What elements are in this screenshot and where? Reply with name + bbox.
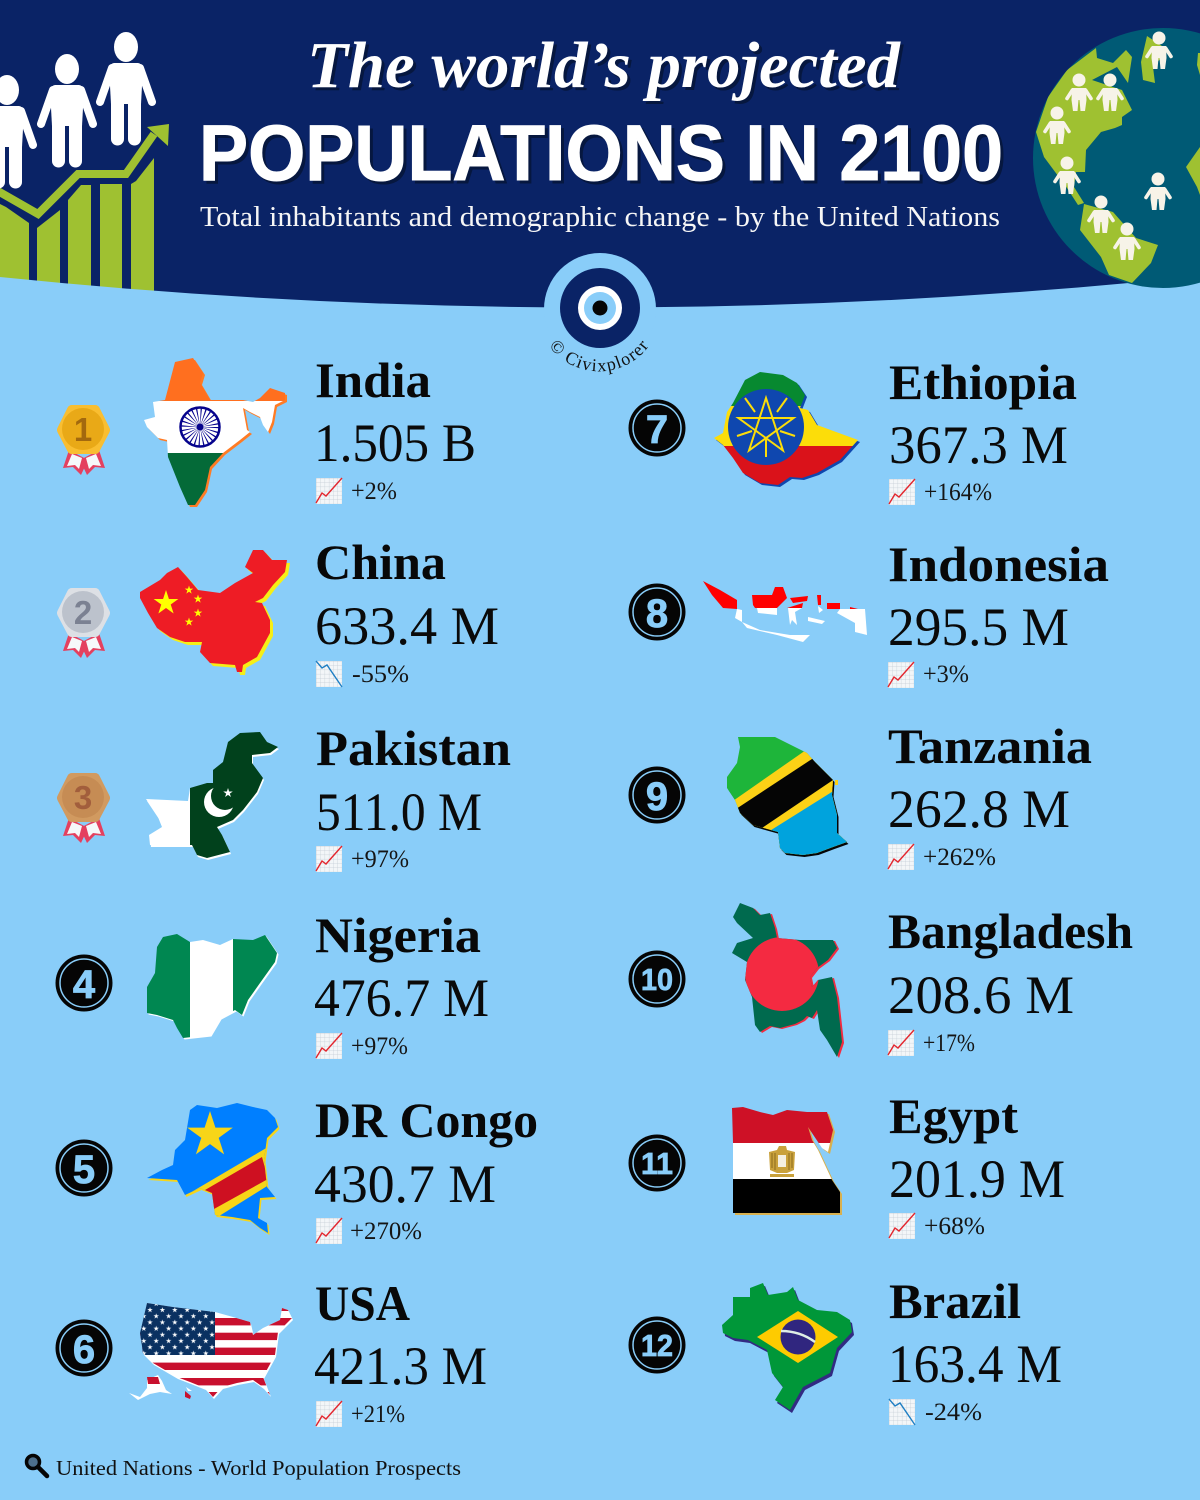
trend icon	[316, 1033, 342, 1059]
rank badge 11	[628, 1134, 686, 1192]
country name: India	[315, 352, 431, 408]
rank badge 7: 7	[646, 408, 668, 452]
country name: DR Congo	[315, 1092, 538, 1148]
country name: Nigeria	[315, 907, 481, 963]
population: 163.4 M	[888, 1334, 1062, 1394]
rank badge 9: 9	[646, 775, 668, 819]
change: -24%	[925, 1399, 982, 1426]
population: 208.6 M	[888, 965, 1074, 1025]
country name: Ethiopia	[889, 354, 1077, 410]
subtitle: Total inhabitants and demographic change - by the United Nations	[200, 201, 1000, 233]
change: -55%	[352, 661, 409, 688]
map: India	[140, 355, 290, 508]
header band	[0, 0, 1200, 340]
logo: eye badge	[544, 253, 656, 365]
trend icon	[888, 844, 914, 870]
row: Bangladesh	[628, 900, 1133, 1060]
map: USA	[129, 1298, 300, 1400]
population: 1.505 B	[314, 413, 476, 473]
change: +17%	[923, 1030, 975, 1057]
population: 430.7 M	[314, 1154, 496, 1214]
emblem: eagle	[769, 1146, 795, 1177]
rank badge 4: 4	[73, 963, 96, 1007]
rank badge 12	[628, 1316, 686, 1374]
icon: growing population chart	[0, 32, 169, 300]
wave: page body edge	[0, 276, 1200, 340]
medal: bronze	[62, 776, 105, 843]
population: 367.3 M	[889, 415, 1068, 475]
row: India	[62, 352, 476, 508]
rank badge 8	[628, 584, 686, 640]
row: Egypt	[628, 1088, 1065, 1240]
country name: Egypt	[889, 1088, 1018, 1144]
country name: Indonesia	[888, 536, 1109, 592]
rank badge 8: 8	[646, 592, 668, 636]
map: Pakistan	[146, 732, 279, 860]
trend icon	[316, 1218, 342, 1244]
change: +97%	[351, 1033, 408, 1060]
trend icon	[316, 846, 342, 872]
change: +262%	[923, 844, 996, 871]
rank badge 9	[628, 766, 686, 824]
logo credit: © Civixplorer	[552, 340, 648, 374]
change: +3%	[923, 661, 969, 688]
population: 295.5 M	[888, 597, 1069, 657]
trend icon	[889, 1213, 915, 1239]
medal: gold	[62, 408, 105, 475]
source note: United Nations - World Population Prospects	[56, 1456, 461, 1480]
title line 2: POPULATIONS IN 2100	[199, 108, 1003, 197]
change: +21%	[351, 1401, 405, 1428]
population: 421.3 M	[314, 1336, 487, 1396]
rank badge 11: 11	[641, 1146, 673, 1181]
country name: Tanzania	[888, 718, 1092, 774]
title line 1: The world’s projected	[307, 29, 901, 102]
map: Ethiopia	[710, 368, 860, 488]
rank badge 10: 10	[641, 962, 673, 997]
map: Brazil	[722, 1283, 854, 1413]
change: +97%	[351, 846, 409, 873]
trend icon	[888, 662, 914, 688]
icon: magnifier	[26, 1456, 47, 1476]
medal: gold: 1	[74, 411, 92, 448]
country name: USA	[315, 1275, 410, 1331]
rank badge 12: 12	[641, 1328, 673, 1363]
row: China	[62, 534, 499, 688]
trend icon	[889, 1399, 915, 1425]
trend icon	[316, 1401, 342, 1427]
country name: Brazil	[889, 1273, 1021, 1329]
map: Bangladesh	[732, 903, 844, 1058]
map: China	[140, 550, 290, 675]
country name: Bangladesh	[888, 903, 1133, 959]
rank badge 6	[56, 1320, 112, 1376]
population: 262.8 M	[888, 779, 1070, 839]
map: Tanzania	[727, 737, 848, 857]
change: +270%	[350, 1218, 422, 1245]
map: Nigeria	[147, 934, 278, 1040]
medal: silver: 2	[74, 594, 92, 631]
change: +68%	[924, 1213, 985, 1240]
medal: bronze: 3	[74, 779, 92, 816]
country name: Pakistan	[316, 720, 511, 776]
icon: globe with people	[1033, 28, 1200, 288]
population: 511.0 M	[316, 782, 482, 842]
rank badge 6: 6	[73, 1328, 95, 1372]
rank badge 5: 5	[73, 1148, 95, 1192]
rank badge 7	[628, 400, 686, 456]
map: DR Congo	[147, 1103, 280, 1235]
country name: China	[315, 534, 446, 590]
trend icon	[889, 479, 915, 505]
row: Pakistan	[62, 720, 511, 873]
population: 476.7 M	[314, 968, 489, 1028]
map: Egypt	[728, 1104, 844, 1215]
change: +164%	[924, 479, 992, 506]
population: 201.9 M	[889, 1149, 1065, 1209]
row: Nigeria	[56, 907, 489, 1060]
row: USA	[56, 1275, 487, 1428]
row: Brazil	[628, 1273, 1062, 1426]
trend icon	[316, 478, 342, 504]
rank badge 5	[56, 1140, 112, 1196]
row: Ethiopia	[628, 354, 1077, 506]
population: 633.4 M	[315, 596, 499, 656]
rank badge 10	[628, 950, 686, 1008]
row: DR Congo	[56, 1092, 538, 1245]
row: Indonesia	[628, 536, 1109, 688]
change: +2%	[351, 478, 397, 505]
rank badge 4	[56, 954, 112, 1012]
medal: silver	[62, 591, 105, 658]
row: Tanzania	[628, 718, 1092, 871]
trend icon	[888, 1030, 914, 1056]
map: Indonesia	[703, 581, 867, 642]
trend icon	[316, 661, 342, 687]
